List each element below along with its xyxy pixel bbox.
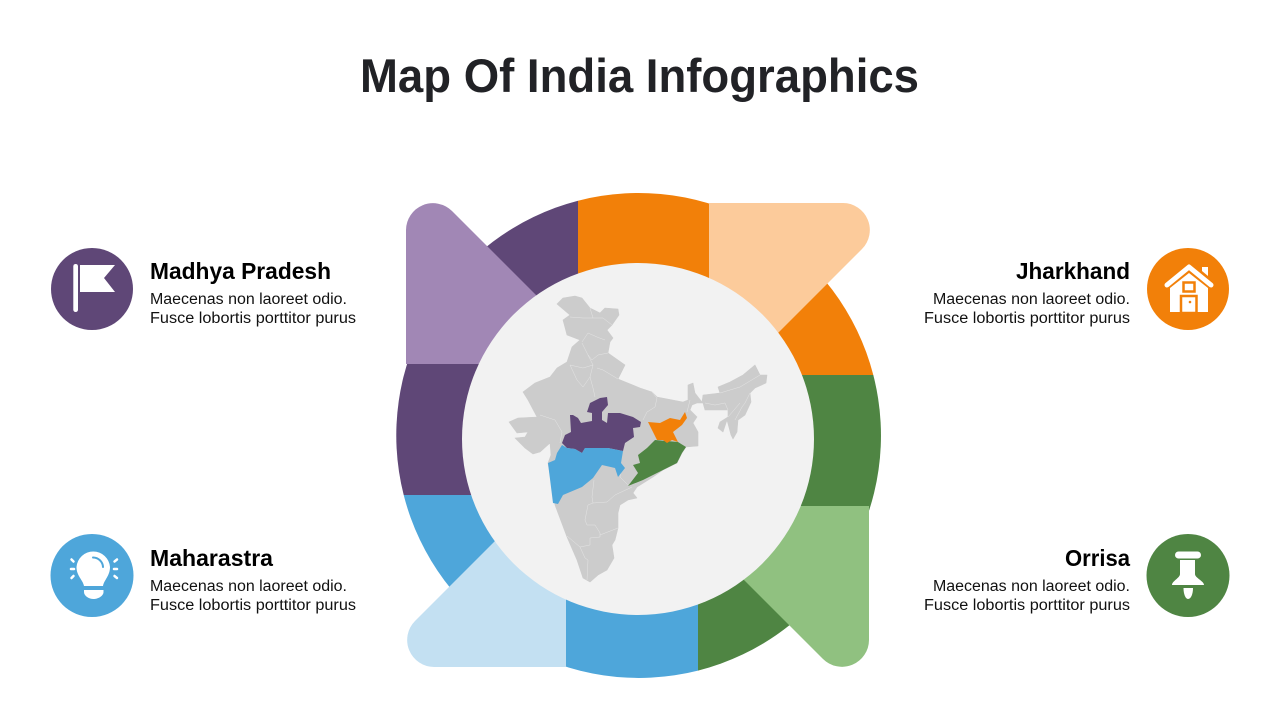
panel: Orrisa <box>924 534 1230 617</box>
icon: house <box>1147 248 1229 330</box>
text block <box>924 578 1130 614</box>
petal: light green <box>700 506 869 667</box>
heading: Madhya Pradesh <box>150 258 331 284</box>
heading: Maharastra <box>150 545 273 571</box>
ring segment: purple <box>396 201 578 495</box>
text block: Maecenas non laoreet odio. <box>933 291 1130 308</box>
petal: light blue <box>407 506 566 667</box>
state: Madhya Pradesh <box>562 397 641 453</box>
heading: Jharkhand <box>1016 258 1130 284</box>
icon: light bulb <box>50 534 134 617</box>
centre circle <box>462 263 814 615</box>
title: Map Of India Infographics <box>360 49 919 102</box>
heading: Orrisa <box>1065 545 1130 571</box>
petal: light purple <box>406 203 560 364</box>
text block: Fusce lobortis porttitor purus <box>924 310 1130 327</box>
text block: Maecenas non laoreet odio. <box>150 291 347 308</box>
text block <box>150 291 356 327</box>
state border lines <box>540 308 760 580</box>
ring segment: green <box>698 375 881 671</box>
text block: Fusce lobortis porttitor purus <box>150 310 356 327</box>
ring diagram with map <box>396 193 881 678</box>
state: Jharkhand <box>648 412 687 443</box>
state: Maharashtra <box>548 445 625 504</box>
icon: push pin <box>1146 534 1230 617</box>
ring segment: blue <box>404 495 698 678</box>
India landmass <box>509 296 767 582</box>
text block: Fusce lobortis porttitor purus <box>150 597 356 614</box>
text block: Fusce lobortis porttitor purus <box>924 597 1130 614</box>
text block: Maecenas non laoreet odio. <box>933 578 1130 595</box>
map of India <box>509 296 767 582</box>
petal: peach <box>709 203 870 361</box>
panel: Maharastra <box>50 534 356 617</box>
icon: flag <box>51 248 133 330</box>
ring segment: orange <box>578 193 873 375</box>
text block: Maecenas non laoreet odio. <box>150 578 347 595</box>
panel: Jharkhand <box>924 248 1229 330</box>
text block <box>924 291 1130 327</box>
text block <box>150 578 356 614</box>
state: Orissa <box>628 440 686 486</box>
panel: Madhya Pradesh <box>51 248 356 330</box>
